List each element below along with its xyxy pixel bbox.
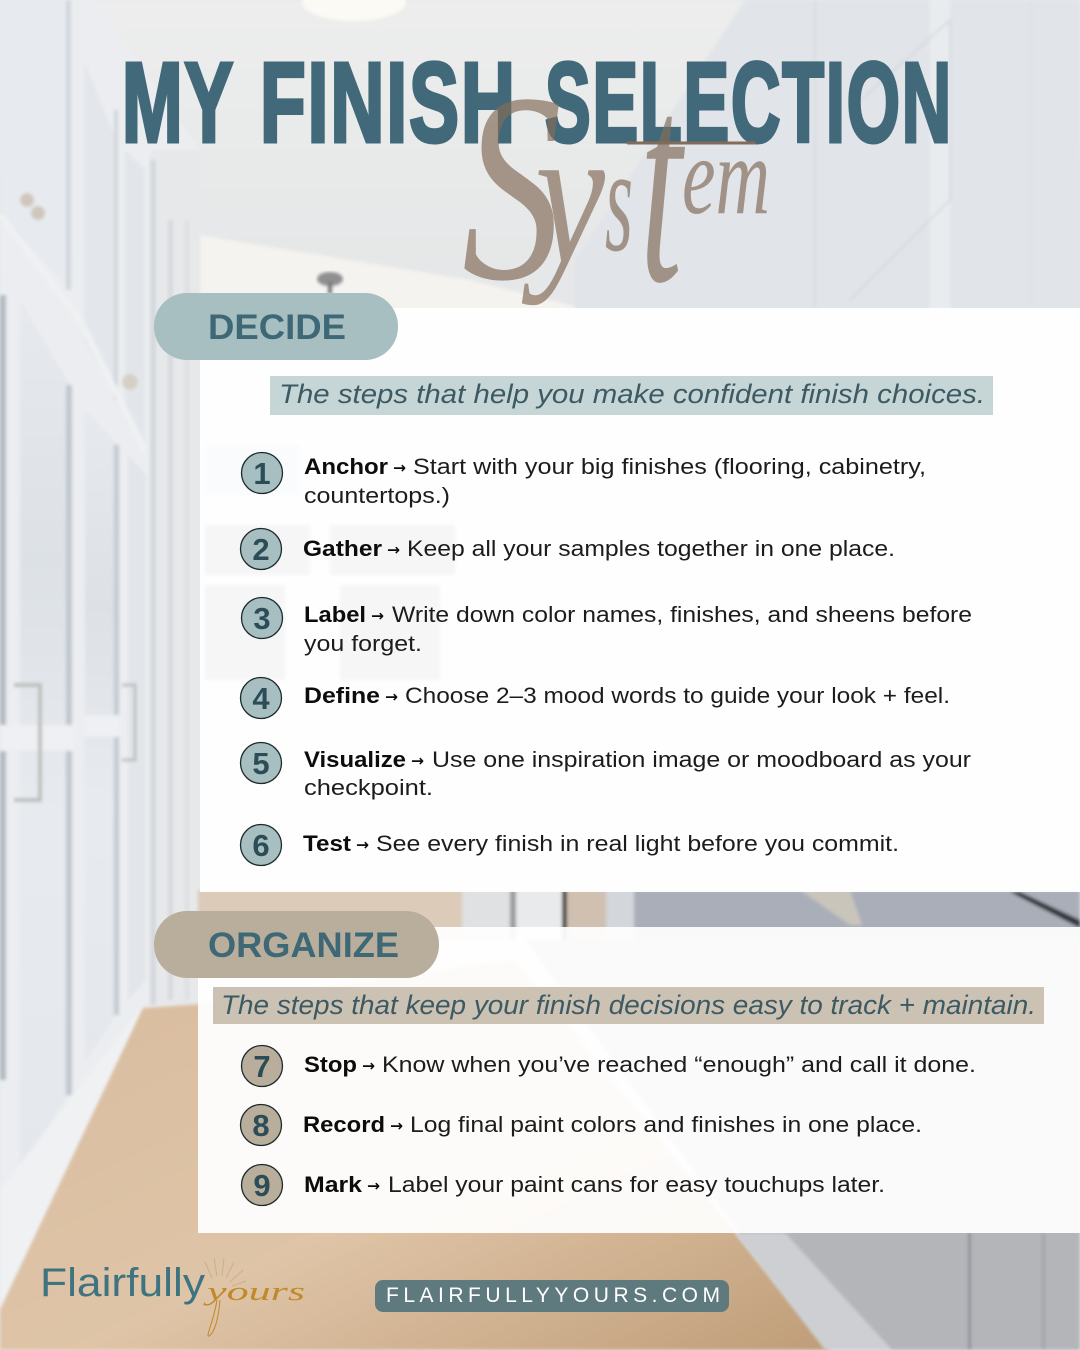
organize intro text: The steps that keep your finish decisions easy to track + maintain. [221, 990, 1036, 1020]
step 3: → [371, 607, 384, 625]
step 7: → [362, 1057, 375, 1075]
panel: organize backdrop [198, 927, 1080, 1233]
section pill: organize: ORGANIZE [208, 926, 399, 965]
step 5: Use one inspiration image or moodboard as your [432, 747, 972, 772]
ceiling [0, 0, 1080, 320]
section pill: organize [154, 911, 439, 978]
step 1: Anchor [304, 454, 388, 479]
step 4 [240, 678, 950, 718]
script subtitle [462, 22, 770, 343]
step 6: Test [303, 831, 352, 856]
step 7: Stop [304, 1052, 357, 1077]
step 1: countertops.) [304, 483, 450, 508]
script subtitle: t [640, 22, 687, 343]
step 1: → [393, 459, 406, 477]
step 2: Keep all your samples together in one place. [407, 536, 895, 561]
step 8: → [390, 1117, 403, 1135]
step 8: Log final paint colors and finishes in one place. [410, 1112, 922, 1137]
step 9: Mark [304, 1172, 363, 1197]
decide intro text [270, 376, 993, 415]
step 6: → [356, 836, 369, 854]
step 3: you forget. [304, 631, 422, 656]
step 2: → [387, 541, 400, 559]
logo: Flairfully Yours: yours [202, 1277, 305, 1306]
title: FINISH [260, 40, 517, 166]
step 9: → [367, 1177, 380, 1195]
step 6: See every finish in real light before you commit. [376, 831, 899, 856]
step 9: Label your paint cans for easy touchups later. [388, 1172, 885, 1197]
ceiling light [302, 0, 406, 21]
lower right cabinets [515, 925, 1080, 1350]
step 7 [242, 1046, 976, 1086]
right upper wall [575, 0, 1080, 315]
step 1: Start with your big finishes (flooring, cabinetry, [413, 454, 926, 479]
rear opening [198, 235, 590, 310]
step 3 [242, 598, 972, 656]
step 6 [240, 824, 899, 866]
step 2 [240, 528, 895, 570]
section pill: decide: DECIDE [208, 308, 346, 347]
title: MY [122, 40, 235, 166]
step 8: 8 [252, 1108, 270, 1143]
step 9: 9 [253, 1168, 271, 1203]
step 7: 7 [253, 1049, 271, 1084]
step 4: → [385, 688, 398, 706]
step 4: 4 [252, 681, 270, 716]
band between panels [198, 890, 1080, 940]
step 1: 1 [253, 456, 271, 491]
step 2: Gather [303, 536, 382, 561]
website badge [375, 1280, 729, 1312]
step 5: checkpoint. [304, 775, 433, 800]
pendant fixture [317, 272, 343, 294]
decide intro text: The steps that help you make confident finish choices. [279, 379, 985, 409]
ghost window reflection [205, 445, 455, 680]
step 5: 5 [252, 746, 270, 781]
step 5: → [411, 752, 424, 770]
step 1 [242, 452, 926, 508]
wood floor [0, 960, 830, 1350]
step 6: 6 [252, 828, 270, 863]
section pill: decide [154, 293, 398, 360]
website badge: FLAIRFULLYYOURS.COM [386, 1284, 720, 1307]
title [122, 40, 953, 166]
script subtitle: y [522, 85, 605, 306]
step 8: Record [303, 1112, 385, 1137]
script subtitle: em [682, 115, 770, 237]
step 4: Define [304, 683, 380, 708]
step 3: Label [304, 602, 366, 627]
panel: decide backdrop [200, 308, 1080, 892]
step 5 [240, 742, 972, 800]
left wall cabinets [0, 0, 200, 1310]
step 3: 3 [253, 601, 271, 636]
step 7: Know when you’ve reached “enough” and call it done. [382, 1052, 976, 1077]
logo: Flairfully Yours: Flairfully [40, 1261, 205, 1305]
script subtitle: s [605, 117, 633, 283]
step 5: Visualize [304, 747, 406, 772]
step 9 [242, 1164, 885, 1206]
step 3: Write down color names, finishes, and sheens before [392, 602, 972, 627]
step 4: Choose 2–3 mood words to guide your look + feel. [405, 683, 950, 708]
script subtitle: S [462, 38, 562, 337]
logo: Flairfully Yours [40, 1258, 305, 1336]
step 2: 2 [252, 532, 270, 567]
step 8 [240, 1104, 922, 1146]
